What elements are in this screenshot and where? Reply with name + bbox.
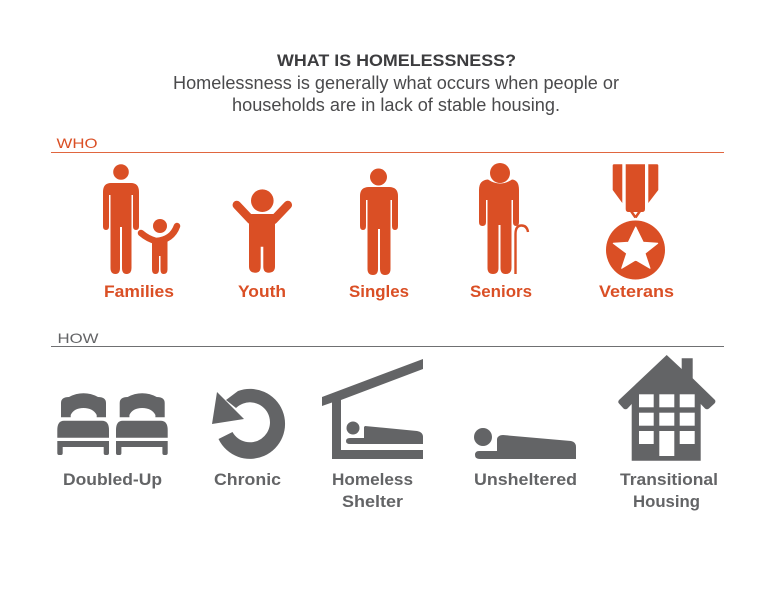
- label: unsheltered: Unsheltered: [474, 470, 577, 489]
- icon: doubled-up beds: [57, 393, 168, 455]
- label: families: Families: [104, 282, 174, 301]
- section heading: how: HOW: [58, 330, 99, 346]
- icon: chronic arrow: [212, 389, 285, 459]
- panel: who: [103, 163, 674, 301]
- label: seniors: Seniors: [470, 282, 532, 301]
- label: transitional housing: Housing: [633, 492, 700, 511]
- panel: how: [57, 355, 718, 511]
- intro text: households are in lack of stable housing.: [232, 95, 560, 115]
- icon: singles: [360, 168, 398, 275]
- label: homeless shelter: [332, 470, 413, 511]
- label: chronic: Chronic: [214, 470, 281, 489]
- label: homeless shelter: Homeless: [332, 470, 413, 489]
- label: singles: Singles: [349, 282, 409, 301]
- label: youth: Youth: [238, 282, 286, 301]
- icon: seniors: [479, 163, 528, 274]
- intro text: Homelessness is generally what occurs when people or: [173, 73, 619, 93]
- icon: transitional housing: [618, 355, 715, 461]
- label: transitional housing: Transitional: [620, 470, 718, 489]
- icon: veterans medal: [606, 164, 665, 280]
- title: WHAT IS HOMELESSNESS?: [277, 51, 516, 70]
- label: homeless shelter: Shelter: [342, 492, 403, 511]
- icon: homeless shelter: [322, 359, 423, 459]
- label: transitional housing: [620, 470, 718, 511]
- section heading: who: WHO: [56, 135, 98, 151]
- label: doubled-up: Doubled-Up: [63, 470, 162, 489]
- icon: families: [103, 164, 177, 274]
- label: veterans: Veterans: [599, 282, 674, 301]
- icon: unsheltered person: [474, 428, 576, 459]
- intro text: [173, 73, 619, 115]
- icon: youth: [237, 189, 288, 273]
